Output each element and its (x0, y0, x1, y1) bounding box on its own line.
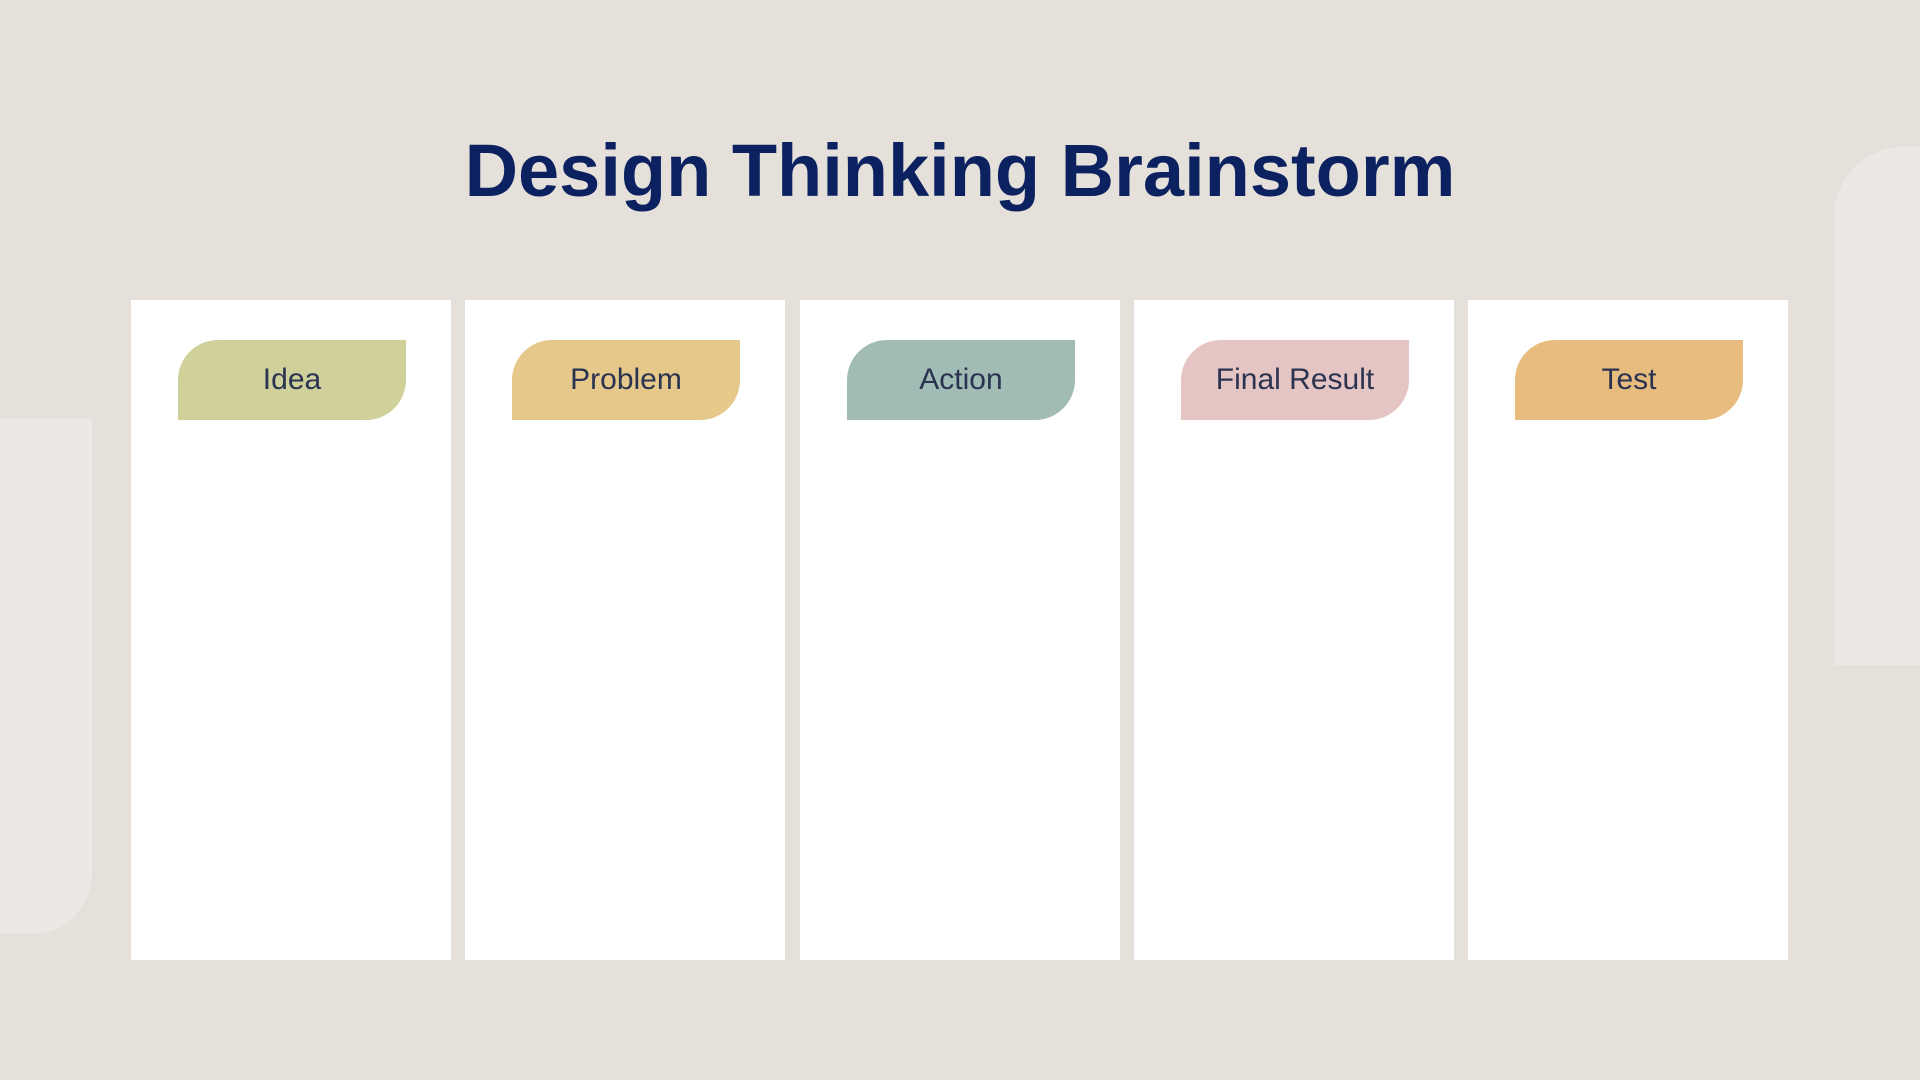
tab: final result (1181, 340, 1409, 420)
tab: action: Action (919, 363, 1003, 396)
tab: idea: Idea (263, 363, 321, 396)
panel: idea (131, 300, 451, 960)
tab: action (847, 340, 1075, 420)
panel: final result (1134, 300, 1454, 960)
tab: problem: Problem (570, 363, 682, 396)
tab: problem (512, 340, 740, 420)
panel: action (800, 300, 1120, 960)
panel: test (1468, 300, 1788, 960)
decorative shape right (1834, 147, 1920, 665)
panel: problem (465, 300, 785, 960)
tab: idea (178, 340, 406, 420)
tab: test: Test (1601, 363, 1657, 396)
tab: final result: Final Result (1216, 363, 1374, 396)
title: Design Thinking Brainstorm (465, 129, 1455, 212)
tab: test (1515, 340, 1743, 420)
decorative shape left (0, 418, 92, 934)
